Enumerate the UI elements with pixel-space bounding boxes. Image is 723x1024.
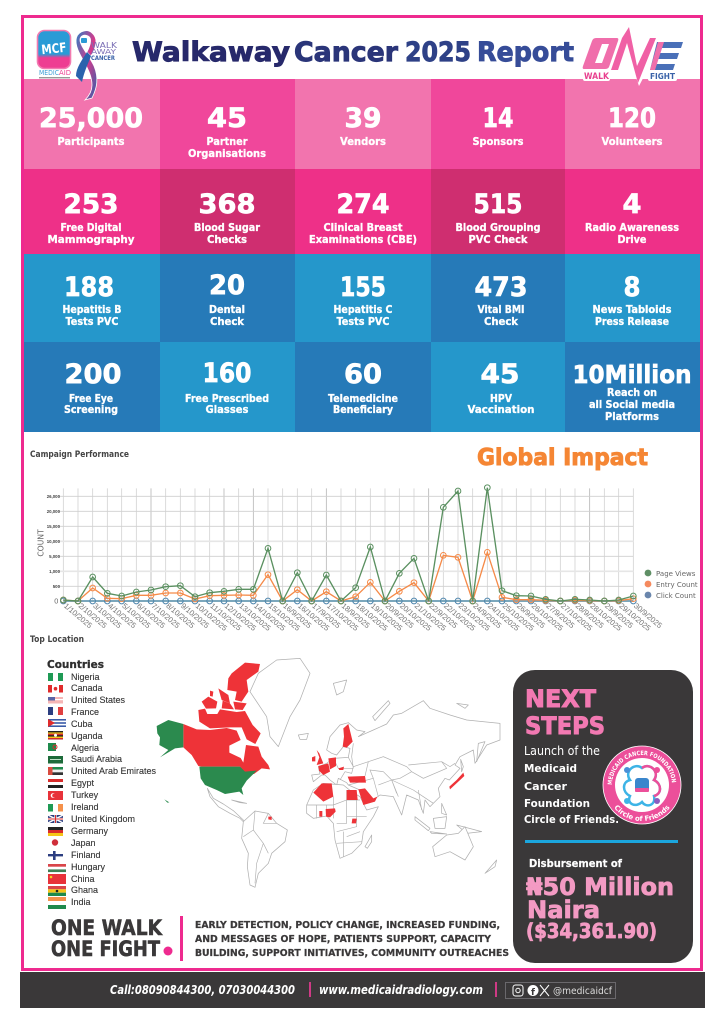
x axis date labels: 1/10/2025 — [62, 601, 94, 630]
australia — [433, 827, 473, 860]
logo: MCF Medicaid — [38, 30, 71, 78]
country: Saudi Arabia: Saudi Arabia — [71, 754, 122, 764]
stat: 155 hepatitis C — [295, 254, 431, 342]
social handles: f — [531, 988, 535, 998]
country: Japan — [52, 838, 96, 848]
stat: 200 free eye screening: Free Eye — [69, 393, 113, 405]
divider: blue line — [525, 840, 678, 843]
text: disbursement: Naira — [527, 896, 600, 924]
x axis date labels: 30/9/2025 — [632, 601, 664, 630]
title — [132, 37, 574, 68]
stat: 368 blood sugar checks: Checks — [207, 234, 247, 246]
stat: 188 hepatitis B: 188 — [64, 272, 114, 303]
stat: 4 radio awareness drive: Radio Awareness — [585, 222, 679, 234]
country: India — [48, 897, 91, 909]
x axis date labels: 7/10/2025 — [150, 601, 182, 630]
x axis date labels: 8/10/2025 — [164, 601, 196, 630]
stat: 188 hepatitis B — [24, 254, 160, 342]
stat: 473 vital BMI: Vital BMI — [478, 304, 524, 316]
heading: next steps: NEXT — [525, 685, 597, 713]
logo: walkaway cancer ribbon: WALK — [91, 41, 118, 50]
text: disbursement: Disbursement of — [529, 857, 622, 870]
y axis labels: 5,000 — [49, 554, 61, 559]
stat: 368 blood sugar checks: 368 — [198, 189, 256, 220]
social handles — [506, 982, 616, 998]
y axis labels — [47, 494, 61, 606]
country: Ireland — [48, 802, 99, 812]
text: campaign focus: BUILDING, SUPPORT INITIATIVES, COMMUNITY OUTREACHES — [195, 948, 509, 959]
heading: next steps — [525, 685, 605, 740]
stat: 14 sponsors: Sponsors — [472, 136, 524, 148]
country: Canada — [48, 683, 103, 693]
y axis labels: 26,000 — [47, 494, 61, 499]
logo: one walk one fight: WALK — [584, 72, 609, 82]
title: Walkaway — [132, 37, 290, 68]
stat: 20 dental check — [160, 254, 295, 342]
x axis date labels: 6/10/2025 — [135, 601, 167, 630]
chart legend: Entry Count — [656, 581, 698, 589]
line chart: campaign performance — [37, 488, 664, 633]
heading: global impact: Global Impact — [477, 445, 648, 471]
x axis date labels: 26/10/2025 — [530, 601, 565, 633]
africa — [307, 783, 378, 858]
y axis labels: 500 — [53, 584, 61, 589]
logo: one walk one fight: FIGHT — [650, 72, 675, 81]
country: Uganda: Uganda — [71, 731, 103, 741]
y axis labels: 15,000 — [47, 524, 61, 529]
x axis date labels: 24/10/2025 — [486, 601, 521, 633]
country: France — [48, 707, 99, 717]
stat: 39 vendors — [295, 79, 431, 169]
heading: next steps: STEPS — [525, 712, 605, 740]
x axis date labels: 4/10/2025 — [106, 601, 138, 630]
stat: 10 million reach: all Social media — [589, 399, 675, 411]
eurasia — [312, 701, 500, 815]
x axis date labels: 11/10/2025 — [208, 601, 243, 632]
stat: 20 dental check: Dental — [209, 304, 245, 316]
x axis date labels: 17/9/2025 — [310, 601, 342, 630]
stat: 368 blood sugar checks: Blood Sugar — [194, 222, 261, 234]
stat: 160 free prescribed glasses: Glasses — [206, 404, 248, 416]
logo: walkaway cancer ribbon: CANCER — [91, 54, 115, 62]
x axis date labels: 3/10/2025 — [91, 601, 123, 630]
stat: 120 volunteers — [565, 79, 700, 169]
logo: walkaway cancer ribbon: AWAY — [91, 48, 117, 56]
stat: 274 clinical breast examinations: Clinical Breast — [324, 222, 402, 234]
x axis date labels: 2/10/2025 — [77, 601, 109, 630]
asian islands — [477, 742, 485, 762]
legend: countries: Countries — [47, 658, 104, 671]
stat: 8 news tabloids: News Tabloids — [592, 304, 672, 316]
canada — [183, 663, 270, 774]
stat: 10 million reach — [565, 342, 700, 432]
guyana highlight — [268, 817, 272, 820]
text: campaign focus: EARLY DETECTION, POLICY CHANGE, INCREASED FUNDING, — [195, 920, 500, 931]
old world — [298, 680, 500, 858]
stat: 60 telemedicine beneficiary: Telemedicine — [328, 393, 398, 405]
y axis labels: 20,000 — [47, 509, 61, 514]
stat: 20 dental check: Check — [210, 316, 245, 328]
central and south america — [207, 788, 245, 823]
country: Ghana — [48, 885, 98, 896]
x axis date labels: 9/10/2025 — [179, 601, 211, 630]
x axis date labels: 21/10/2025 — [413, 601, 448, 633]
stat: 188 hepatitis B: Tests PVC — [66, 316, 119, 328]
country: Ghana: Ghana — [71, 885, 98, 895]
x axis date labels: 10/10/2025 — [194, 601, 229, 633]
country: Turkey — [48, 790, 99, 800]
country: Nigeria: Nigeria — [71, 672, 100, 682]
y axis labels: 10,000 — [47, 539, 61, 544]
country: France: France — [71, 707, 99, 717]
stat: 45 HPV vaccination: 45 — [480, 359, 520, 390]
highlighted old world countries — [312, 724, 464, 823]
x axis date labels: 24/9/2025 — [471, 601, 503, 630]
text: launch of circle of friends: Circle of Friends. — [524, 813, 619, 826]
country: Cuba: Cuba — [71, 719, 93, 729]
stat: 274 clinical breast examinations: Examinations (CBE) — [309, 234, 417, 246]
x axis date labels: 26/9/2025 — [515, 601, 547, 630]
text: launch of circle of friends — [524, 744, 619, 826]
country: Canada: Canada — [71, 683, 103, 693]
stat: 155 hepatitis C: 155 — [340, 272, 386, 303]
stat: 60 telemedicine beneficiary — [295, 342, 431, 432]
x axis date labels: 22/9/2025 — [427, 601, 459, 630]
stat: 515 blood grouping: PVC Check — [468, 234, 528, 246]
series: page views — [63, 488, 633, 601]
stat: 515 blood grouping — [431, 169, 565, 254]
text: disbursement — [526, 857, 674, 943]
x axis date labels: 19/10/2025 — [369, 601, 404, 633]
text: disbursement: ($34,361.90) — [526, 919, 657, 943]
text: launch of circle of friends: Launch of the — [524, 744, 600, 758]
stat: 8 news tabloids: Press Release — [595, 316, 669, 328]
x axis date labels: 15/10/2025 — [267, 601, 302, 633]
stat: 473 vital BMI: 473 — [474, 272, 528, 303]
x axis date labels: 12/10/2025 — [223, 601, 258, 633]
stat: 515 blood grouping: Blood Grouping — [456, 222, 540, 234]
stat: 10 million reach: Reach on — [607, 387, 657, 399]
country: Saudi Arabia — [48, 754, 122, 764]
x axis date labels: 23/10/2025 — [457, 601, 492, 633]
stat: 473 vital BMI — [431, 254, 565, 342]
country: Nigeria — [48, 672, 100, 682]
x axis date labels: 17/10/2025 — [325, 601, 360, 633]
logo: MCF Medicaid: AID — [59, 69, 71, 77]
greenland — [250, 658, 310, 747]
stat: 39 vendors: Vendors — [340, 136, 386, 148]
stat: 200 free eye screening: 200 — [64, 359, 122, 390]
stat: 253 free digital mammography — [24, 169, 160, 254]
chart legend — [645, 570, 698, 600]
stat: 8 news tabloids: 8 — [624, 272, 640, 303]
text: campaign focus — [195, 920, 509, 959]
country: China: China — [71, 874, 95, 884]
x axis date labels — [62, 601, 664, 633]
series: click count — [63, 598, 633, 604]
tagline: one walk one fight: ONE FIGHT — [51, 937, 161, 961]
x axis date labels: 27/9/2025 — [544, 601, 576, 630]
logo: one walk one fight — [583, 26, 683, 86]
stat: 45 partner organisations: 45 — [207, 103, 247, 134]
stat: 200 free eye screening: Screening — [64, 404, 118, 416]
x axis date labels: 14/10/2025 — [252, 601, 287, 633]
stat: 200 free eye screening — [24, 342, 160, 432]
x axis date labels: 20/9/2025 — [384, 601, 416, 630]
x axis date labels: 29/10/2025 — [617, 601, 653, 633]
stat: 274 clinical breast examinations — [295, 169, 431, 254]
stat: 45 partner organisations: Organisations — [188, 148, 266, 160]
text: launch of circle of friends: Foundation — [524, 797, 590, 810]
stat: 274 clinical breast examinations: 274 — [336, 189, 390, 220]
accent bar — [180, 916, 183, 961]
stat: 45 HPV vaccination: HPV — [490, 393, 513, 405]
stat: 25,000 participants: 25,000 — [39, 103, 143, 134]
x axis date labels: 16/10/2025 — [296, 601, 331, 633]
text: campaign focus: AND MESSAGES OF HOPE, PATIENTS SUPPORT, CAPACITY — [195, 934, 492, 945]
country: Japan: Japan — [71, 838, 96, 848]
stat: 45 HPV vaccination — [431, 342, 565, 432]
stat: 155 hepatitis C: Tests PVC — [336, 316, 390, 328]
country: Germany: Germany — [71, 826, 109, 836]
title: Cancer — [294, 37, 399, 68]
stat: 8 news tabloids — [565, 254, 700, 342]
country: Ireland: Ireland — [71, 802, 99, 812]
stat grid — [24, 79, 700, 432]
logo: walkaway cancer ribbon — [76, 31, 118, 100]
country: Hungary: Hungary — [71, 862, 106, 872]
x axis date labels: 13/10/2025 — [237, 601, 273, 633]
stat: 253 free digital mammography: 253 — [64, 189, 118, 220]
series: entry count — [63, 552, 633, 601]
logo: MCF Medicaid: MEDIC — [39, 69, 59, 77]
stat: 25,000 participants — [24, 79, 160, 169]
country: Egypt — [48, 778, 95, 788]
usa — [157, 720, 257, 803]
stat: 253 free digital mammography: Mammography — [48, 234, 135, 246]
x axis date labels: 25/10/2025 — [501, 601, 536, 633]
stat: 4 radio awareness drive — [565, 169, 700, 254]
stat: 10 million reach: 10Million — [572, 360, 692, 389]
title: Report — [477, 37, 574, 68]
stat: 160 free prescribed glasses — [160, 342, 295, 432]
x axis date labels: 16/9/2025 — [281, 601, 313, 630]
panel: next steps — [513, 670, 693, 963]
stat: 160 free prescribed glasses: 160 — [202, 358, 252, 389]
stat: 60 telemedicine beneficiary: 60 — [344, 359, 382, 390]
y axis labels: 1,000 — [49, 569, 61, 574]
chart legend: Click Count — [656, 592, 696, 600]
x axis date labels: 27/10/2025 — [559, 601, 594, 633]
stat: 368 blood sugar checks — [160, 169, 295, 254]
country: Finland: Finland — [71, 850, 101, 860]
x axis date labels: 28/9/2025 — [574, 601, 606, 630]
badge: circle of friends: MEDICAID CANCER FOUNDATION — [608, 750, 676, 784]
badge: circle of friends: Circle of Friends — [615, 805, 670, 821]
legend: countries — [47, 658, 157, 909]
stat: 14 sponsors — [431, 79, 565, 169]
stat: 20 dental check: 20 — [209, 270, 245, 301]
website: www.medicaidradiology.com — [319, 982, 483, 997]
x axis date labels: 29/9/2025 — [603, 601, 635, 630]
stat: 120 volunteers: Volunteers — [602, 136, 662, 148]
country: United Arab Emirates: United Arab Emirates — [71, 766, 157, 776]
y axis labels: 0 — [54, 597, 58, 606]
stat: 188 hepatitis B: Hepatitis B — [62, 304, 122, 316]
x axis date labels: 18/10/2025 — [354, 601, 390, 633]
y axis title: COUNT — [37, 529, 46, 557]
title: 2025 — [405, 37, 471, 68]
text: launch of circle of friends: Medicaid — [524, 762, 577, 775]
country: Hungary — [48, 862, 106, 872]
country: Germany — [48, 826, 109, 836]
x axis date labels: 22/10/2025 — [442, 601, 477, 633]
country: Algeria — [48, 743, 99, 753]
text: launch of circle of friends: Cancer — [524, 780, 568, 793]
stat: 14 sponsors: 14 — [482, 103, 514, 134]
stat: 473 vital BMI: Check — [484, 316, 519, 328]
country: United Kingdom: United Kingdom — [71, 814, 135, 824]
stat: 25,000 participants: Participants — [58, 136, 124, 148]
x axis date labels: 28/10/2025 — [588, 601, 624, 633]
heading: campaign performance: Campaign Performance — [30, 450, 129, 460]
stat: 10 million reach: Platforms — [605, 411, 659, 423]
world map — [157, 658, 500, 887]
tagline: one walk one fight: ONE WALK — [51, 916, 163, 940]
stat: 160 free prescribed glasses: Free Prescribed — [185, 393, 269, 405]
chart legend: Page Views — [656, 570, 696, 578]
country: China — [48, 874, 95, 884]
stat: 253 free digital mammography: Free Digital — [60, 222, 122, 234]
stat: 45 HPV vaccination: Vaccination — [468, 404, 534, 416]
stat: 4 radio awareness drive: 4 — [622, 189, 642, 220]
country: Cuba — [48, 719, 93, 729]
country: Uganda — [48, 731, 103, 741]
x axis date labels: 20/10/2025 — [398, 601, 433, 633]
country: Algeria: Algeria — [71, 743, 99, 753]
social handles: @medicaidcf — [553, 986, 612, 997]
country: Turkey: Turkey — [71, 790, 99, 800]
country: Finland — [48, 850, 101, 860]
stat: 515 blood grouping: 515 — [474, 189, 522, 220]
stat: 45 partner organisations: Partner — [206, 136, 248, 148]
country: United States: United States — [71, 695, 126, 705]
x axis date labels: 18/9/2025 — [340, 601, 372, 630]
heading: top location: Top Location — [30, 635, 84, 645]
stat: 4 radio awareness drive: Drive — [618, 234, 646, 246]
stat: 60 telemedicine beneficiary: Beneficiary — [333, 404, 393, 416]
logo: MCF Medicaid: MCF — [41, 41, 67, 58]
country: United States — [48, 695, 126, 705]
x axis date labels: 5/10/2025 — [120, 601, 152, 630]
stat: 45 partner organisations — [160, 79, 295, 169]
contact phone: Call:08090844300, 07030044300 — [110, 982, 295, 997]
stat: 39 vendors: 39 — [344, 103, 382, 134]
tagline: one walk one fight — [51, 916, 172, 961]
stat: 120 volunteers: 120 — [608, 103, 656, 134]
text: disbursement: ₦50 Million — [526, 873, 674, 901]
stat: 155 hepatitis C: Hepatitis C — [334, 304, 393, 316]
badge: circle of friends — [602, 746, 682, 824]
footer bar — [20, 972, 705, 1008]
country: India: India — [71, 897, 91, 907]
country: Egypt: Egypt — [71, 778, 95, 788]
